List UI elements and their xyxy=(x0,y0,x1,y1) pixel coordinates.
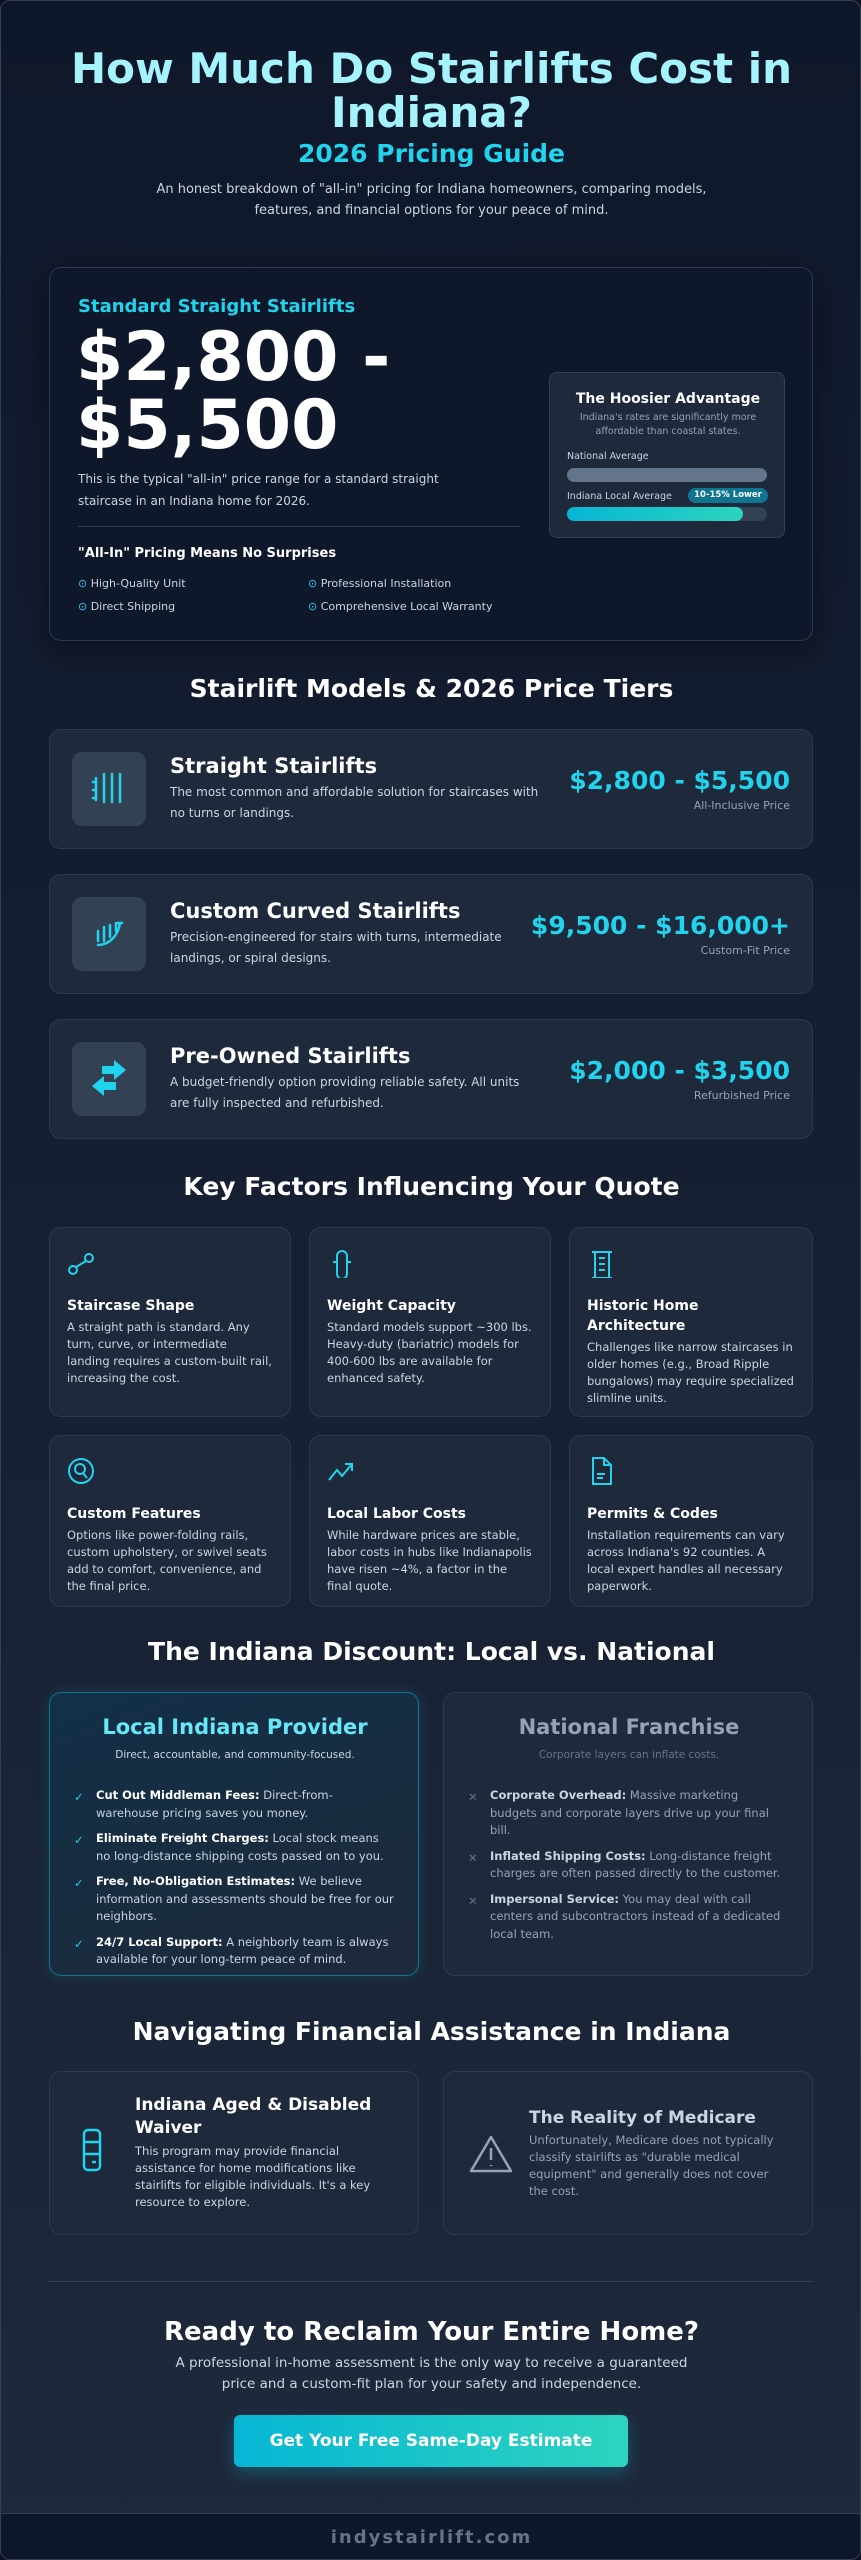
icon: curved rail xyxy=(72,897,146,971)
hoosier advantage box: Indiana's rates are significantly more affordable than coastal states. xyxy=(580,412,756,437)
panel: hero price: ⊙ Direct Shipping xyxy=(78,600,175,613)
waiver text: This program may provide financial assistance for home modifications like stairlifts for eligible individuals. It's a key resource to explore. xyxy=(135,2144,370,2209)
icon: exchange arrows xyxy=(72,1042,146,1116)
heading: indiana discount: The Indiana Discount: Local vs. National xyxy=(148,1637,715,1666)
hero price: $5,500 xyxy=(76,386,338,465)
panel: national franchise: Corporate layers can inflate costs. xyxy=(539,1749,719,1761)
heading: key factors: Key Factors Influencing Your Quote xyxy=(183,1172,680,1201)
panel: weight capacity: Standard models support ~300 lbs. Heavy-duty (bariatric) models for 400-600 lbs are available for enhanced safety. xyxy=(327,1320,532,1385)
panel: permits & codes xyxy=(569,1435,813,1607)
price: $9,500 - $16,000+ xyxy=(531,911,790,940)
panel: hero price: ⊙ Professional Installation xyxy=(308,577,451,590)
text: Custom Curved Stairlifts xyxy=(170,899,460,923)
national drawbacks list: Impersonal Service: You may deal with call centers and subcontractors instead of a dedicated local team. xyxy=(490,1892,780,1940)
cta button xyxy=(234,2415,628,2467)
national drawbacks list xyxy=(468,1788,780,1940)
medicare text: Unfortunately, Medicare does not typically classify stairlifts as "durable medical equipment" and generally does not cover the cost. xyxy=(529,2133,774,2198)
national heading: National Franchise xyxy=(519,1715,739,1739)
hoosier advantage box: National Average xyxy=(567,451,649,462)
cta text: A professional in-home assessment is the only way to receive a guaranteed price and a custom-fit plan for your safety and independence. xyxy=(176,2355,687,2392)
local benefits list: ✓ xyxy=(74,1833,84,1847)
price: All-Inclusive Price xyxy=(694,799,790,812)
national drawbacks list: Corporate Overhead: Massive marketing budgets and corporate layers drive up your final bill. xyxy=(490,1788,769,1837)
panel: custom features: Custom Features xyxy=(67,1506,201,1522)
all-in heading: "All-In" Pricing Means No Surprises xyxy=(78,546,336,561)
text: Pre-Owned Stairlifts xyxy=(170,1044,410,1068)
icon: straight rail xyxy=(72,752,146,826)
panel: custom features: Options like power-folding rails, custom upholstery, or swivel seats add to comfort, convenience, and the final price. xyxy=(67,1528,267,1593)
panel: local provider xyxy=(49,1692,419,1976)
local benefits list: Cut Out Middleman Fees: Direct-from-warehouse pricing saves you money. xyxy=(96,1788,333,1820)
panel: staircase shape xyxy=(49,1227,291,1417)
local heading: Local Indiana Provider xyxy=(102,1715,368,1739)
icon: warning xyxy=(470,2136,512,2172)
text xyxy=(170,899,502,965)
local benefits list: Free, No-Obligation Estimates: We believe information and assessments should be free for our neighbors. xyxy=(96,1874,394,1923)
hero label: Standard Straight Stairlifts xyxy=(78,296,355,317)
panel: medicare xyxy=(443,2071,813,2235)
text xyxy=(170,1044,519,1110)
panel: permits & codes: Installation requirements can vary across Indiana's 92 counties. A local expert handles all necessary paperwork. xyxy=(587,1528,785,1593)
hoosier advantage box: 10-15% Lower xyxy=(694,490,762,500)
panel: historic home: Challenges like narrow staircases in older homes (e.g., Broad Ripple bungalows) may require specialized slimline units. xyxy=(587,1340,794,1405)
national drawbacks list: Inflated Shipping Costs: Long-distance freight charges are often passed directly to the customer. xyxy=(490,1848,780,1880)
price: Refurbished Price xyxy=(694,1089,790,1102)
hoosier advantage box: Indiana Local Average xyxy=(567,491,672,502)
panel: historic home xyxy=(569,1227,813,1417)
panel: curved stairlifts xyxy=(49,874,813,994)
price: $2,800 - $5,500 xyxy=(569,766,790,795)
text: Straight Stairlifts xyxy=(170,754,377,778)
cta heading: Ready to Reclaim Your Entire Home? xyxy=(164,2317,699,2347)
local benefits list: ✓ xyxy=(74,1790,84,1804)
panel: pre-owned stairlifts xyxy=(49,1019,813,1139)
national drawbacks list: ✕ xyxy=(468,1790,478,1804)
text: Precision-engineered for stairs with turns, intermediate landings, or spiral designs. xyxy=(170,930,502,965)
waiver text xyxy=(134,2095,371,2209)
heading: models: Stairlift Models & 2026 Price Tiers xyxy=(190,674,673,703)
national drawbacks list: ✕ xyxy=(468,1894,478,1908)
local benefits list: 24/7 Local Support: A neighborly team is always available for your long-term peace of mind. xyxy=(96,1934,388,1966)
panel: local provider: Direct, accountable, and community-focused. xyxy=(115,1749,355,1761)
national drawbacks list: ✕ xyxy=(468,1850,478,1864)
local benefits list: ✓ xyxy=(74,1936,84,1950)
hero price: $2,800 - xyxy=(76,318,390,397)
panel: local labor costs xyxy=(309,1435,551,1607)
hoosier advantage box: The Hoosier Advantage xyxy=(576,391,760,407)
panel: straight stairlifts xyxy=(49,729,813,849)
panel: waiver xyxy=(49,2071,419,2235)
panel: hero price: ⊙ Comprehensive Local Warranty xyxy=(308,600,492,613)
panel: weight capacity xyxy=(309,1227,551,1417)
checklist xyxy=(78,577,492,613)
title: How Much Do Stairlifts Cost in Indiana? xyxy=(71,44,792,137)
panel: national franchise xyxy=(443,1692,813,1976)
price: $2,000 - $3,500 xyxy=(569,1056,790,1085)
footer: indystairlift.com xyxy=(331,2527,532,2548)
panel: staircase shape: A straight path is standard. Any turn, curve, or intermediate landing requires a custom-built rail, increasing the cost. xyxy=(67,1320,272,1385)
panel: custom features xyxy=(49,1435,291,1607)
hero description: This is the typical "all-in" price range for a standard straight staircase in an Indiana home for 2026. xyxy=(78,472,439,508)
panel: permits & codes: Permits & Codes xyxy=(587,1506,718,1522)
text xyxy=(170,754,538,820)
hero price xyxy=(76,318,390,465)
waiver text: Indiana Aged & Disabled Waiver xyxy=(135,2095,371,2138)
medicare text: The Reality of Medicare xyxy=(529,2108,756,2128)
panel: hero price: ⊙ High-Quality Unit xyxy=(78,577,186,590)
local benefits list: ✓ xyxy=(74,1876,84,1890)
panel: local labor costs: Local Labor Costs xyxy=(327,1506,466,1522)
price xyxy=(531,911,790,957)
text: The most common and affordable solution for staircases with no turns or landings. xyxy=(170,785,538,820)
price xyxy=(569,1056,790,1102)
hoosier advantage box xyxy=(549,372,785,538)
subtitle: 2026 Pricing Guide xyxy=(298,139,565,168)
local benefits list xyxy=(74,1788,394,1966)
text: A budget-friendly option providing reliable safety. All units are fully inspected and refurbished. xyxy=(170,1075,519,1110)
intro text: An honest breakdown of "all-in" pricing for Indiana homeowners, comparing models, features, and financial options for your peace of mind. xyxy=(156,182,707,218)
price xyxy=(569,766,790,812)
panel: weight capacity: Weight Capacity xyxy=(327,1298,456,1314)
panel: staircase shape: Staircase Shape xyxy=(67,1298,194,1314)
footer xyxy=(1,2513,861,2560)
cta button: Get Your Free Same-Day Estimate xyxy=(270,2431,592,2451)
price: Custom-Fit Price xyxy=(701,944,790,957)
icon: waiver xyxy=(82,2128,102,2172)
local benefits list: Eliminate Freight Charges: Local stock means no long-distance shipping costs passed on to you. xyxy=(96,1831,384,1862)
panel: local labor costs: While hardware prices are stable, labor costs in hubs like Indianapolis have risen ~4%, a factor in the final quote. xyxy=(327,1528,532,1593)
panel: historic home: Historic Home Architecture xyxy=(587,1298,698,1334)
panel: hero price xyxy=(49,267,813,641)
heading: financial assistance: Navigating Financial Assistance in Indiana xyxy=(133,2017,730,2046)
